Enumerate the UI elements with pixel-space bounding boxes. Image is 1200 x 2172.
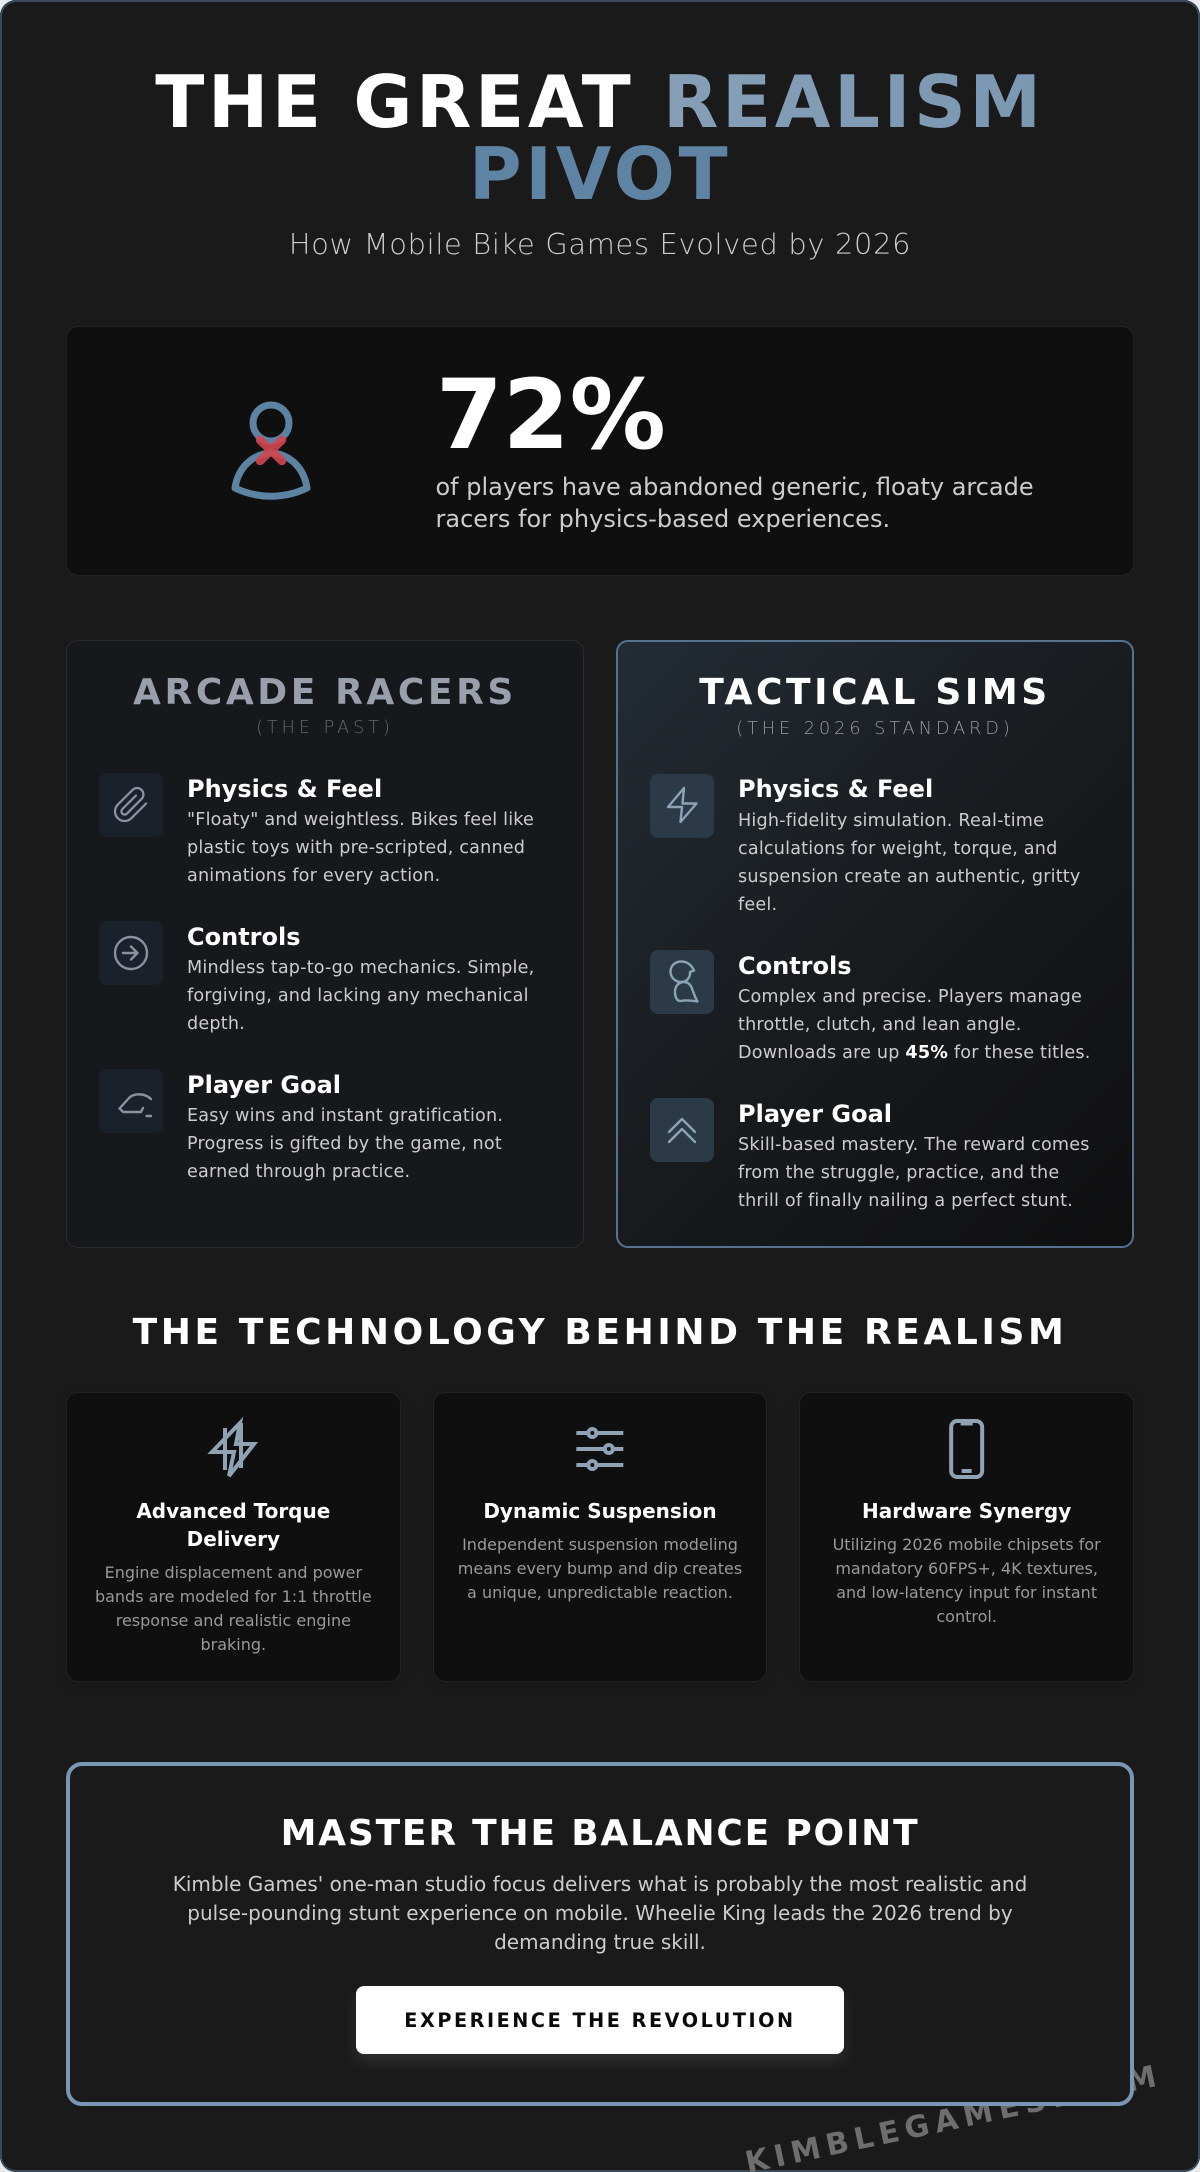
card description: Independent suspension modeling <box>462 1534 738 1554</box>
item title: Controls <box>187 923 300 951</box>
cta text: pulse-pounding stunt experience on mobile. Wheelie King leads the 2026 trend by <box>187 1901 1013 1925</box>
item title: Player Goal <box>738 1100 892 1128</box>
item description <box>738 986 1091 1063</box>
card title: Advanced Torque <box>136 1498 330 1522</box>
item description: feel. <box>738 895 777 915</box>
item description: "Floaty" and weightless. Bikes feel like <box>187 810 534 830</box>
cta text: demanding true skill. <box>494 1930 706 1954</box>
item description: Complex and precise. Players manage <box>738 986 1082 1006</box>
card title <box>136 1498 330 1551</box>
card description <box>458 1534 742 1602</box>
card description: response and realistic engine <box>116 1610 351 1630</box>
icon: rider figure <box>650 950 714 1014</box>
item description: throttle, clutch, and lean angle. <box>738 1015 1022 1035</box>
card description: a unique, unpredictable reaction. <box>467 1582 733 1602</box>
heading: arcade racers: ARCADE RACERS <box>133 672 517 713</box>
panel: tactical sims <box>616 640 1134 1248</box>
icon: player with red cross <box>232 402 310 500</box>
card title: Hardware Synergy <box>862 1498 1071 1522</box>
card description: mandatory 60FPS+, 4K textures, <box>835 1558 1098 1578</box>
card description: Engine displacement and power <box>105 1562 362 1582</box>
card description: means every bump and dip creates <box>458 1558 742 1578</box>
heading: tactical sims: TACTICAL SIMS <box>699 672 1051 713</box>
cta text: Kimble Games' one-man studio focus delivers what is probably the most realistic and <box>173 1872 1027 1896</box>
item description: plastic toys with pre-scripted, canned <box>187 838 525 858</box>
item: controls <box>99 921 534 1034</box>
card: advanced torque delivery <box>66 1392 401 1682</box>
item: player goal <box>650 1098 1090 1211</box>
panel: key statistic <box>66 326 1134 576</box>
item description <box>738 1134 1090 1211</box>
card description: bands are modeled for 1:1 throttle <box>95 1586 372 1606</box>
icon: overlapped lightning bolts <box>207 1416 258 1478</box>
title: THE GREAT REALISM <box>155 60 1045 144</box>
card title: Delivery <box>187 1527 280 1551</box>
cta button <box>356 1986 844 2054</box>
card description: and low-latency input for instant <box>836 1582 1097 1602</box>
card: hardware synergy <box>799 1392 1134 1682</box>
stat description: of players have abandoned generic, floaty arcade <box>436 473 1034 501</box>
item description: from the struggle, practice, and the <box>738 1163 1059 1183</box>
item description: depth. <box>187 1014 245 1034</box>
item title: Player Goal <box>187 1071 341 1099</box>
item description: suspension create an authentic, gritty <box>738 867 1080 887</box>
item description: animations for every action. <box>187 866 440 886</box>
item title: Physics & Feel <box>187 775 382 803</box>
card description: control. <box>936 1606 997 1626</box>
cta button: EXPERIENCE THE REVOLUTION <box>404 2009 796 2032</box>
item: player goal <box>99 1069 503 1182</box>
icon: phone <box>949 1419 984 1479</box>
card description <box>95 1562 372 1654</box>
item description: Downloads are up 45% for these titles. <box>738 1043 1091 1063</box>
cta text <box>173 1872 1027 1954</box>
subtitle: How Mobile Bike Games Evolved by 2026 <box>289 226 911 260</box>
item description <box>187 958 534 1034</box>
panel: call to action <box>66 1762 1134 2106</box>
icon: arrow in circle <box>99 921 163 985</box>
subheading: the past: (THE PAST) <box>256 718 394 738</box>
item description: Skill-based mastery. The reward comes <box>738 1134 1090 1154</box>
cta heading: MASTER THE BALANCE POINT <box>281 1813 919 1854</box>
item description: Mindless tap-to-go mechanics. Simple, <box>187 958 534 978</box>
section heading: technology: THE TECHNOLOGY BEHIND THE REALISM <box>133 1312 1067 1353</box>
item description <box>187 1106 503 1182</box>
icon: double chevron up <box>650 1098 714 1162</box>
item description: thrill of finally nailing a perfect stunt. <box>738 1191 1073 1211</box>
item: physics and feel <box>650 774 1080 915</box>
card description: braking. <box>200 1634 266 1654</box>
item description: calculations for weight, torque, and <box>738 839 1057 859</box>
item description: earned through practice. <box>187 1162 410 1182</box>
item description: Easy wins and instant gratification. <box>187 1106 503 1126</box>
item description: High-fidelity simulation. Real-time <box>738 810 1044 830</box>
icon: arcade bike outline <box>99 1069 163 1133</box>
icon: lightning bolt <box>650 774 714 838</box>
subheading: the 2026 standard: (THE 2026 STANDARD) <box>736 719 1014 739</box>
item description: Progress is gifted by the game, not <box>187 1134 502 1154</box>
title: PIVOT <box>469 132 731 216</box>
item description <box>187 810 534 886</box>
card: dynamic suspension <box>433 1392 767 1682</box>
card title: Dynamic Suspension <box>483 1498 717 1522</box>
item description <box>738 810 1080 915</box>
card description: Utilizing 2026 mobile chipsets for <box>833 1534 1101 1554</box>
icon: sliders <box>576 1427 624 1471</box>
item description: forgiving, and lacking any mechanical <box>187 986 529 1006</box>
item title: Physics & Feel <box>738 775 933 803</box>
panel: arcade racers <box>66 640 584 1248</box>
stat description <box>436 473 1034 533</box>
item title: Controls <box>738 952 852 980</box>
item: controls <box>650 950 1091 1063</box>
card description <box>833 1534 1101 1626</box>
item: physics and feel <box>99 773 534 886</box>
title <box>155 60 1045 216</box>
stat number: 72% <box>436 359 666 471</box>
stat description: racers for physics-based experiences. <box>436 505 890 533</box>
icon: paperclip <box>99 773 163 837</box>
